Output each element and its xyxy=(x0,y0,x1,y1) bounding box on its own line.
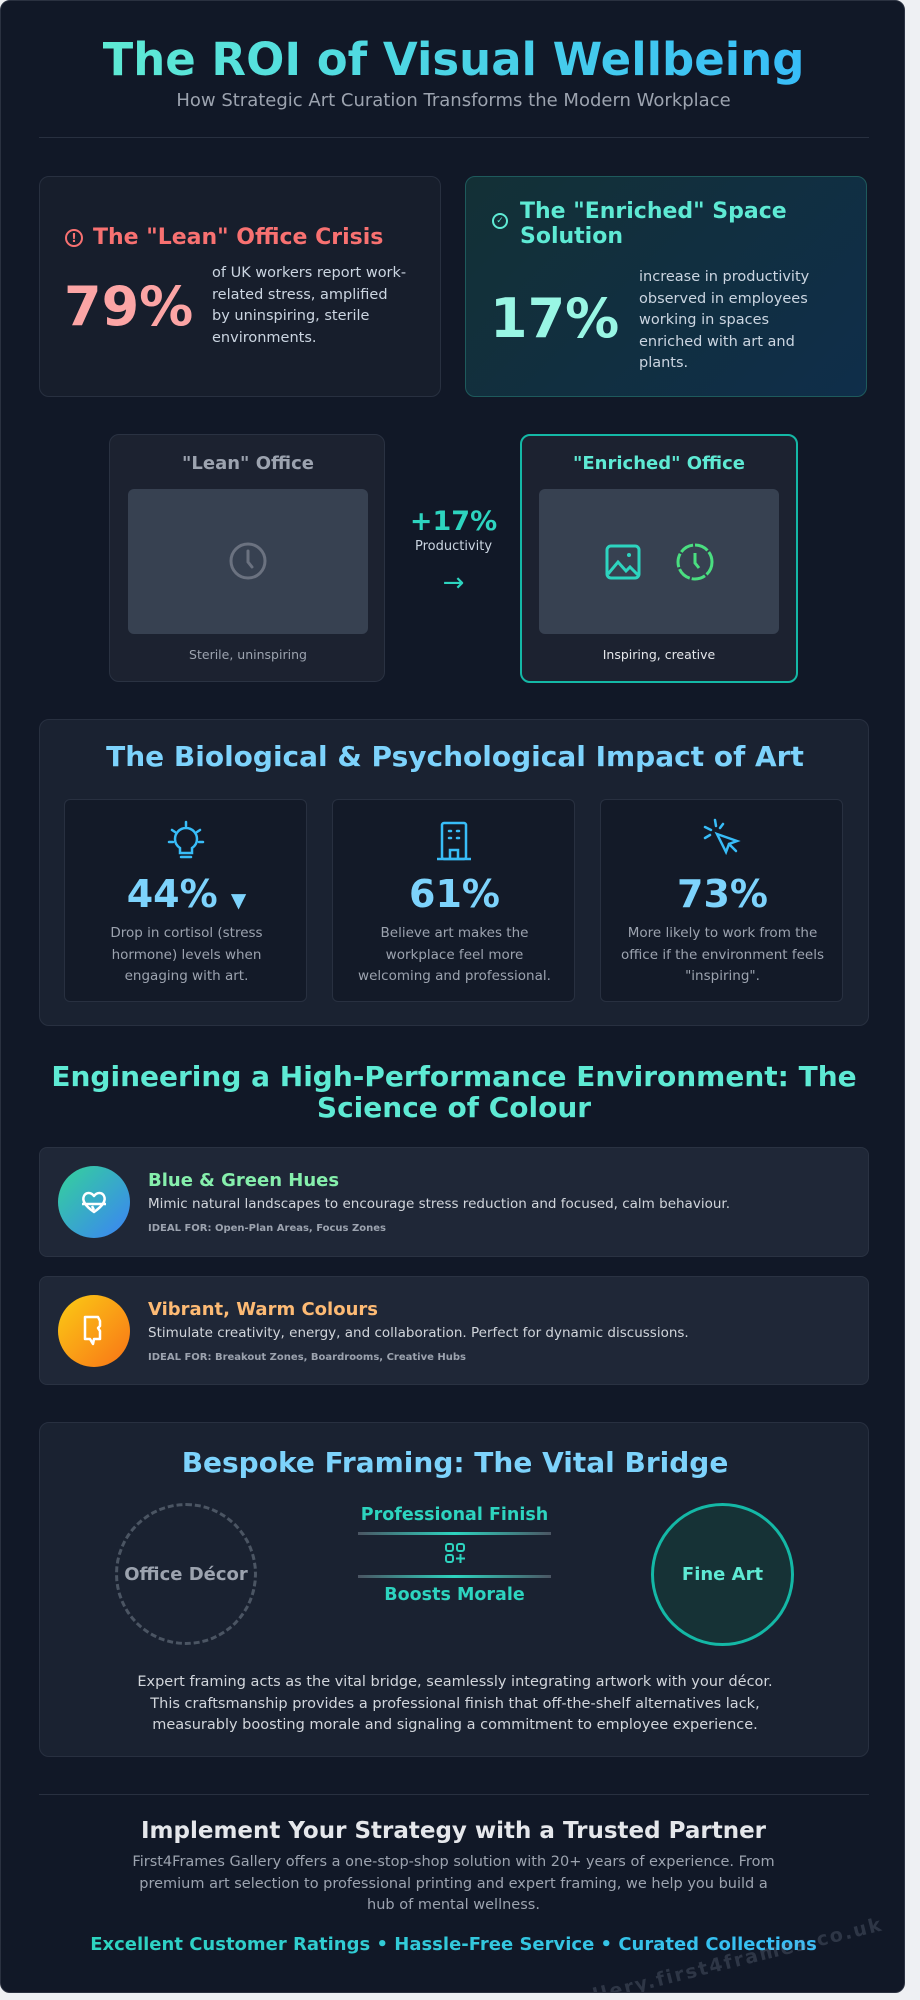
arrow: productivity gain: Productivity xyxy=(415,539,492,554)
stat card: 73% xyxy=(600,799,843,1002)
panel: lean office comparison xyxy=(109,434,385,682)
title: The ROI of Visual Wellbeing xyxy=(103,33,804,86)
circle: office decor: Office Décor xyxy=(124,1564,248,1584)
circle: fine art: Fine Art xyxy=(682,1564,763,1585)
panel: lean office comparison: Sterile, uninspiring xyxy=(189,647,307,662)
heading: trusted partner: Implement Your Strategy with a Trusted Partner xyxy=(141,1818,766,1844)
panel: lean office crisis xyxy=(39,176,441,397)
panel: vibrant warm colours: Stimulate creativity, energy, and collaboration. Perfect for dynamic discussions. xyxy=(148,1325,689,1341)
panel: vibrant warm colours: Vibrant, Warm Colours xyxy=(148,1299,378,1320)
heading: enriched: ✓ xyxy=(496,216,504,226)
heading: impact: The Biological & Psychological Impact of Art xyxy=(106,740,804,773)
stat card: 44%: Drop in cortisol (stress hormone) levels when engaging with art. xyxy=(110,925,263,984)
heading: framing: Bespoke Framing: The Vital Bridge xyxy=(182,1446,728,1479)
bridge: professional finish / boosts morale xyxy=(358,1505,551,1605)
benefits line: Excellent Customer Ratings • Hassle-Free Service • Curated Collections xyxy=(90,1934,817,1955)
heading: lean crisis: ! xyxy=(71,231,77,245)
panel: enriched office comparison xyxy=(520,434,798,683)
subtitle: How Strategic Art Curation Transforms the Modern Workplace xyxy=(176,90,731,111)
heading: lean crisis: The "Lean" Office Crisis xyxy=(93,225,383,250)
heading: enriched: The "Enriched" Space Solution xyxy=(520,199,787,249)
panel: blue & green hues: Mimic natural landscapes to encourage stress reduction and focused, calm behaviour. xyxy=(148,1196,730,1212)
panel: bespoke framing xyxy=(39,1422,869,1757)
arrow: productivity gain xyxy=(410,506,497,598)
stat card: 61% xyxy=(332,799,575,1002)
icon: speech bubble xyxy=(58,1295,130,1367)
panel: biological & psychological impact xyxy=(39,719,869,1026)
stat card: 44%: 44% ▼ xyxy=(127,872,246,916)
panel: vibrant warm colours: IDEAL FOR: Breakout Zones, Boardrooms, Creative Hubs xyxy=(148,1352,466,1363)
panel: blue & green hues: Blue & Green Hues xyxy=(148,1170,339,1191)
stat card: 61%: 61% xyxy=(409,872,500,916)
stat: 17%: 17% xyxy=(490,287,619,350)
arrow: productivity gain: +17% xyxy=(410,506,497,537)
panel: lean office comparison: "Lean" Office xyxy=(182,453,314,474)
text: partner description: First4Frames Gallery offers a one-stop-shop solution with 20+ years of experience. From premium art selection to professional printing and expert framing, we help you build a hub of mental wellness. xyxy=(132,1854,775,1913)
panel: blue & green hues: IDEAL FOR: Open-Plan Areas, Focus Zones xyxy=(148,1223,386,1234)
icon: clock xyxy=(128,489,368,634)
panel: enriched office comparison: Inspiring, creative xyxy=(603,647,715,662)
panel: enriched office comparison: "Enriched" Office xyxy=(573,453,745,474)
stat card: 61%: Believe art makes the workplace feel more welcoming and professional. xyxy=(358,925,551,984)
icon: heart xyxy=(58,1166,130,1238)
panel: blue & green hues xyxy=(39,1147,869,1257)
stat card: 44% xyxy=(64,799,307,1002)
panel: enriched solution xyxy=(465,176,867,397)
bridge: professional finish / boosts morale: Professional Finish xyxy=(361,1505,548,1525)
text: framing description: Expert framing acts as the vital bridge, seamlessly integrating artwork with your décor. This craftsmanship provides a professional finish that off-the-shelf alternatives lack, measurably boosting morale and signaling a commitment to employee experience. xyxy=(137,1674,773,1733)
circle: fine art xyxy=(651,1503,794,1646)
icons: art and plant xyxy=(539,489,779,634)
arrow: productivity gain: → xyxy=(443,568,464,598)
bridge: professional finish / boosts morale: Boosts Morale xyxy=(384,1585,525,1605)
text: lean description: of UK workers report work-related stress, amplified by uninspiring, sterile environments. xyxy=(212,265,406,346)
heading: science of colour: Engineering a High-Performance Environment: The Science of Colour xyxy=(51,1060,857,1124)
stat card: 73%: More likely to work from the office if the environment feels "inspiring". xyxy=(621,925,824,984)
text: enriched description: increase in productivity observed in employees working in spaces enriched with art and plants. xyxy=(639,269,809,371)
panel: vibrant warm colours xyxy=(39,1276,869,1385)
stat card: 73%: 73% xyxy=(677,872,768,916)
circle: office decor xyxy=(115,1503,257,1645)
stat: 79%: 79% xyxy=(64,275,193,338)
